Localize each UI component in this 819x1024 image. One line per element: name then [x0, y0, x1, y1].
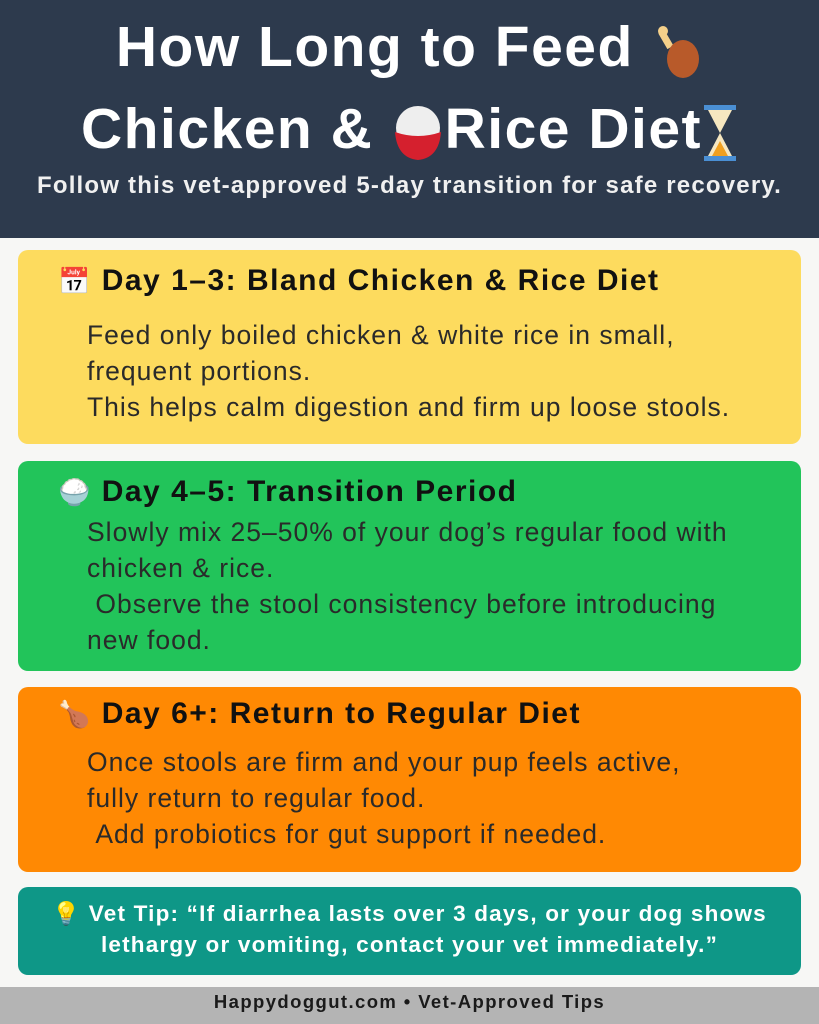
- panel: day 6+: [18, 687, 801, 872]
- text day 4-5: chicken & rice.: [87, 553, 274, 583]
- footer: Happydoggut.com • Vet-Approved Tips: [214, 991, 605, 1012]
- heading day 1-3: 📅 Day 1–3: Bland Chicken & Rice Diet: [58, 264, 660, 297]
- text day 1-3: [87, 320, 730, 422]
- text day 6+: Add probiotics for gut support if needed.: [95, 819, 606, 849]
- text day 6+: Once stools are firm and your pup feels active,: [87, 747, 680, 777]
- callout: vet tip: 💡 Vet Tip: “If diarrhea lasts over 3 days, or your dog shows: [52, 901, 767, 926]
- text day 4-5: Slowly mix 25–50% of your dog’s regular food with: [87, 517, 728, 547]
- title line 2: Chicken & Rice Diet: [81, 97, 702, 161]
- header: [0, 0, 819, 238]
- text day 4-5: new food.: [87, 625, 211, 655]
- text day 6+: [87, 747, 680, 849]
- panel: day 4-5: [18, 461, 801, 671]
- text day 1-3: frequent portions.: [87, 356, 311, 386]
- callout: vet tip: [18, 887, 801, 975]
- title line 1: How Long to Feed: [116, 15, 634, 79]
- text day 4-5: Observe the stool consistency before introducing: [95, 589, 716, 619]
- footer: [0, 987, 819, 1024]
- subtitle: Follow this vet-approved 5-day transition for safe recovery.: [37, 172, 782, 199]
- text day 1-3: This helps calm digestion and firm up loose stools.: [87, 392, 730, 422]
- callout: vet tip: lethargy or vomiting, contact your vet immediately.”: [101, 932, 718, 957]
- heading day 6+: 🍗 Day 6+: Return to Regular Diet: [58, 697, 581, 730]
- text day 6+: fully return to regular food.: [87, 783, 425, 813]
- text day 1-3: Feed only boiled chicken & white rice in small,: [87, 320, 675, 350]
- panel: day 1-3: [18, 250, 801, 444]
- text day 4-5: [87, 517, 728, 655]
- heading day 4-5: 🍚 Day 4–5: Transition Period: [58, 475, 518, 508]
